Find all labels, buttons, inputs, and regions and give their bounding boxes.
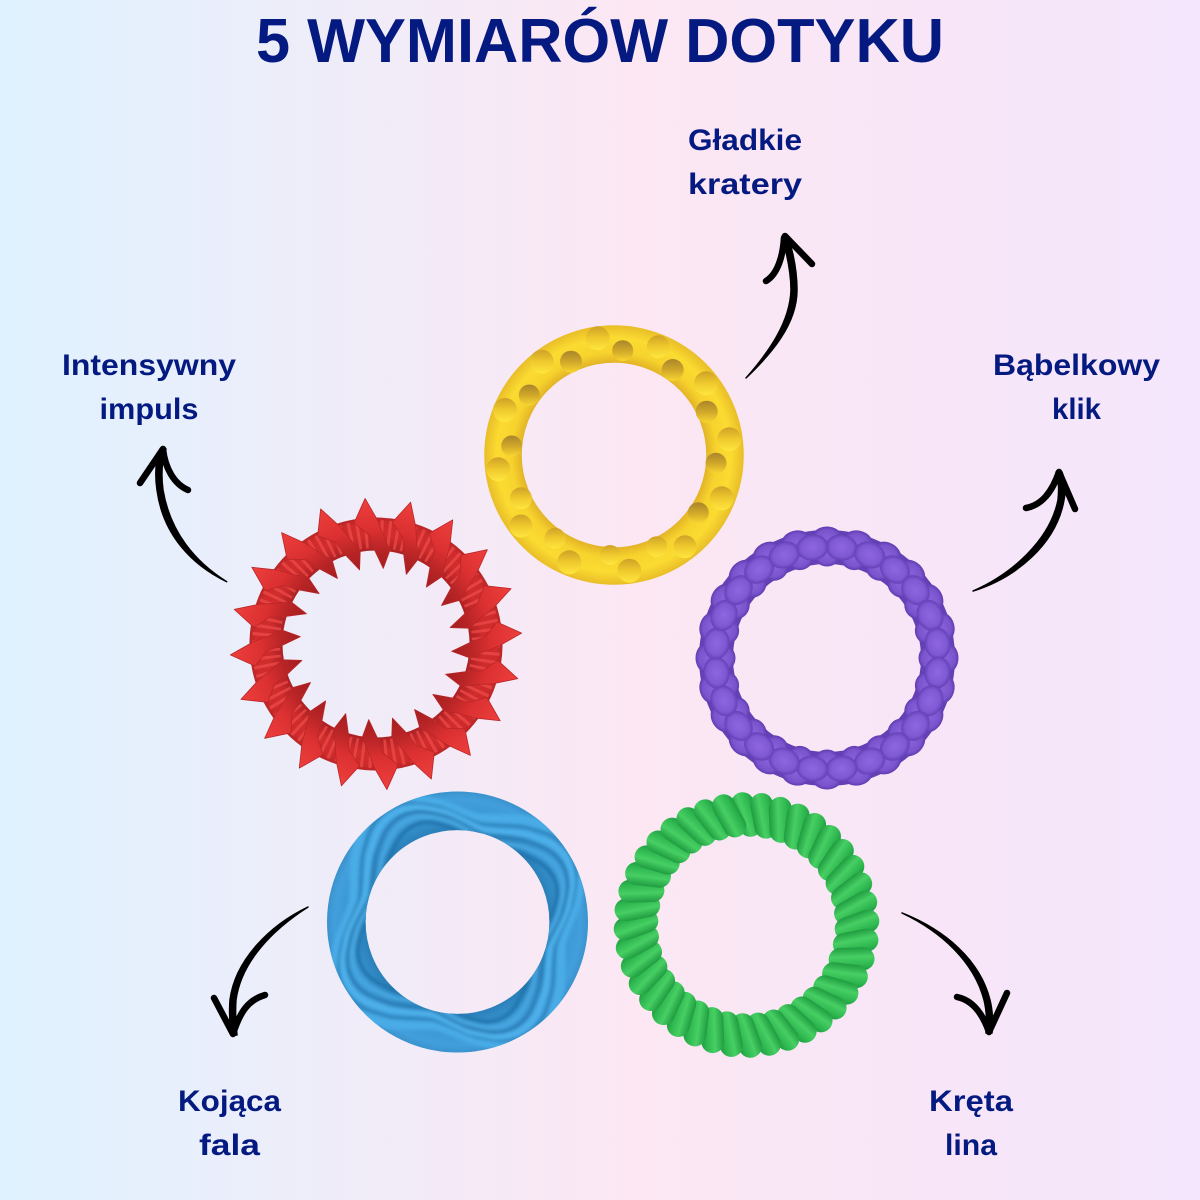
- label: Bąbelkowy klik: klik: [1052, 393, 1101, 426]
- label: Kojąca fala: [178, 1085, 281, 1162]
- label: Intensywny impuls: Intensywny: [62, 349, 236, 382]
- ring: blue waves: [327, 792, 588, 1052]
- ring: purple bubbles: [687, 518, 967, 798]
- ring: red spiked: [230, 498, 522, 790]
- label: Gładkie kratery: [688, 124, 802, 201]
- title: 5 WYMIARÓW DOTYKU: [256, 7, 944, 76]
- label: Bąbelkowy klik: [993, 349, 1160, 426]
- arrow: to Bąbelkowy klik: [973, 472, 1075, 591]
- arrow: to Kojąca fala: [214, 907, 308, 1035]
- label: Kojąca fala: fala: [199, 1129, 260, 1162]
- ring: green twisted rope: [582, 761, 911, 1089]
- label: Kręta lina: [929, 1085, 1013, 1162]
- label: Bąbelkowy klik: Bąbelkowy: [993, 349, 1160, 382]
- arrow: to Kręta lina: [902, 913, 1007, 1033]
- label: Gładkie kratery: kratery: [688, 168, 802, 201]
- label: Kojąca fala: Kojąca: [178, 1085, 281, 1118]
- label: Kręta lina: lina: [945, 1129, 997, 1162]
- label: Intensywny impuls: [62, 349, 236, 426]
- arrow: to Gładkie kratery: [746, 236, 812, 378]
- label: Gładkie kratery: Gładkie: [688, 124, 802, 157]
- ring: yellow smooth craters: [486, 326, 741, 583]
- arrow: to Intensywny impuls: [140, 449, 227, 582]
- label: Intensywny impuls: impuls: [100, 393, 198, 426]
- label: Kręta lina: Kręta: [929, 1085, 1013, 1118]
